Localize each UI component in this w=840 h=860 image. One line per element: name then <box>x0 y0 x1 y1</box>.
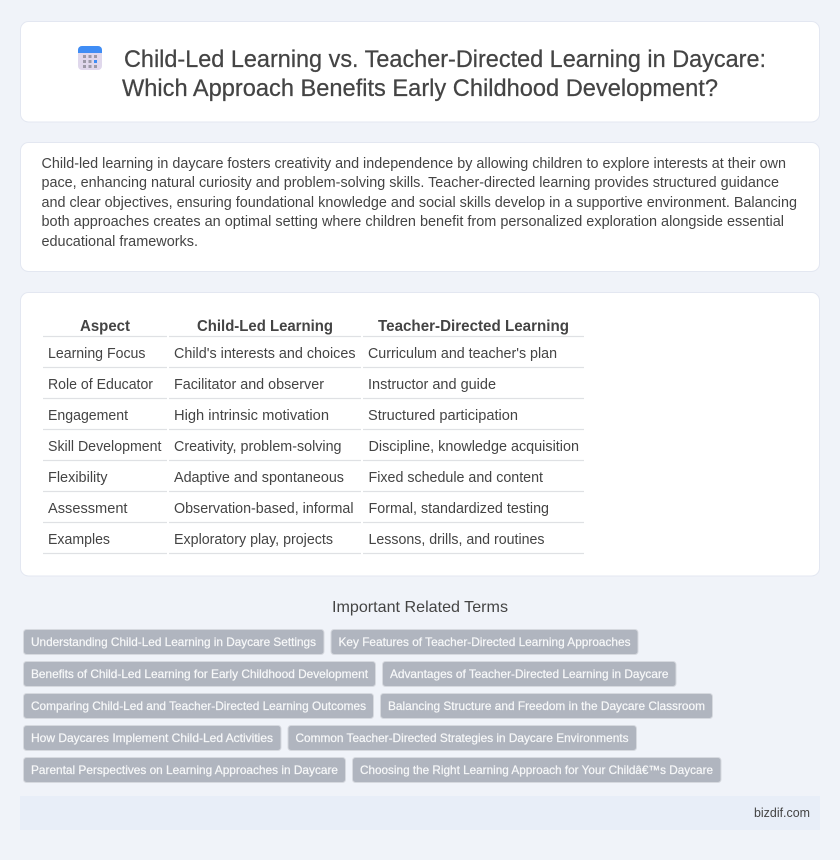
tag: choosing the right approach <box>352 758 721 782</box>
table row: examples: Lessons, drills, and routines <box>368 532 544 548</box>
tag: common strategies: Common Teacher-Directed Strategies in Daycare Environments <box>296 731 628 745</box>
table row: skill development: Skill Development <box>48 439 162 455</box>
tag: how daycares implement: How Daycares Implement Child-Led Activities <box>31 731 273 745</box>
panel: comparison table <box>20 292 820 576</box>
tag: parental perspectives: Parental Perspectives on Learning Approaches in Daycare <box>31 763 338 777</box>
table row: learning focus: Learning Focus <box>48 346 146 362</box>
table row: role of educator: Facilitator and observer <box>174 377 324 393</box>
table row: engagement: High intrinsic motivation <box>174 408 329 424</box>
tag: common strategies <box>288 726 636 750</box>
table row: role of educator <box>48 377 496 393</box>
tag: key features <box>331 630 638 654</box>
table row: skill development: Discipline, knowledge acquisition <box>368 439 579 455</box>
title: Child-Led Learning vs. Teacher-Directed Learning in Daycare: <box>124 46 766 73</box>
panel: introduction <box>20 142 820 272</box>
table row: role of educator: Role of Educator <box>48 377 153 393</box>
table row: assessment: Formal, standardized testing <box>368 501 549 517</box>
tag: advantages of teacher-directed learning <box>382 662 676 686</box>
table header row: Child-Led Learning <box>197 318 333 335</box>
table row: flexibility <box>48 470 543 486</box>
text block: introduction paragraph: educational frameworks. <box>42 234 198 250</box>
tag: choosing the right approach: Choosing the Right Learning Approach for Your Childâ€™s Daycare <box>360 763 713 777</box>
table row: examples: Exploratory play, projects <box>174 532 333 548</box>
table row: examples <box>48 532 544 548</box>
text block: introduction paragraph: Child-led learning in daycare fosters creativity and independence by allowing children to explore interests at their own <box>42 156 786 172</box>
tag: understanding child-led learning: Understanding Child-Led Learning in Daycare Settings <box>31 635 316 649</box>
table row: engagement <box>48 408 518 424</box>
tag: benefits of child-led learning <box>24 662 376 686</box>
text block: introduction paragraph <box>42 156 797 250</box>
footer: bizdif.com <box>754 805 810 820</box>
table row: flexibility: Flexibility <box>48 470 108 486</box>
icon: abacus <box>78 46 102 70</box>
text block: introduction paragraph: pace, enhancing natural curiosity and problem-solving skills. Teacher-directed learning provides structured guidance <box>42 175 779 191</box>
table row: assessment <box>48 501 549 517</box>
table row: role of educator: Instructor and guide <box>368 377 496 393</box>
tag: comparing outcomes <box>24 694 374 718</box>
tag: comparing outcomes: Comparing Child-Led and Teacher-Directed Learning Outcomes <box>31 699 366 713</box>
table row: assessment: Observation-based, informal <box>174 501 354 517</box>
text block: introduction paragraph: both approaches creates an optimal setting where children benefit from personalized exploration alongside essential <box>42 214 784 230</box>
heading: important related terms: Important Related Terms <box>332 599 508 616</box>
table header row: Teacher-Directed Learning <box>378 318 569 335</box>
table row: learning focus: Child's interests and choices <box>174 346 356 362</box>
text block: introduction paragraph: and clear objectives, ensuring foundational knowledge and social skills develop in a supportive environment. Balancing <box>42 195 797 211</box>
title <box>122 46 766 102</box>
tag: parental perspectives <box>24 758 346 782</box>
table row: engagement: Engagement <box>48 408 128 424</box>
footer <box>20 796 820 830</box>
table row: skill development: Creativity, problem-solving <box>174 439 342 455</box>
table row: flexibility: Fixed schedule and content <box>368 470 543 486</box>
panel: header <box>20 22 820 122</box>
tag: understanding child-led learning <box>24 630 324 654</box>
tag: how daycares implement <box>24 726 281 750</box>
table header row <box>80 318 569 335</box>
related terms tags <box>24 630 721 782</box>
table row: flexibility: Adaptive and spontaneous <box>174 470 344 486</box>
table row: learning focus: Curriculum and teacher's plan <box>368 346 557 362</box>
tag: benefits of child-led learning: Benefits of Child-Led Learning for Early Childhood Development <box>31 667 369 681</box>
table row: assessment: Assessment <box>48 501 128 517</box>
table row: skill development <box>48 439 579 455</box>
tag: balancing structure and freedom: Balancing Structure and Freedom in the Daycare Classroom <box>388 699 705 713</box>
table row: examples: Examples <box>48 532 110 548</box>
tag: key features: Key Features of Teacher-Directed Learning Approaches <box>338 635 630 649</box>
tag: advantages of teacher-directed learning: Advantages of Teacher-Directed Learning in Daycare <box>390 667 669 681</box>
tag: balancing structure and freedom <box>380 694 712 718</box>
table row: engagement: Structured participation <box>368 408 518 424</box>
table row: learning focus <box>48 346 557 362</box>
table header row: Aspect <box>80 318 131 335</box>
title: Which Approach Benefits Early Childhood Development? <box>122 75 718 102</box>
